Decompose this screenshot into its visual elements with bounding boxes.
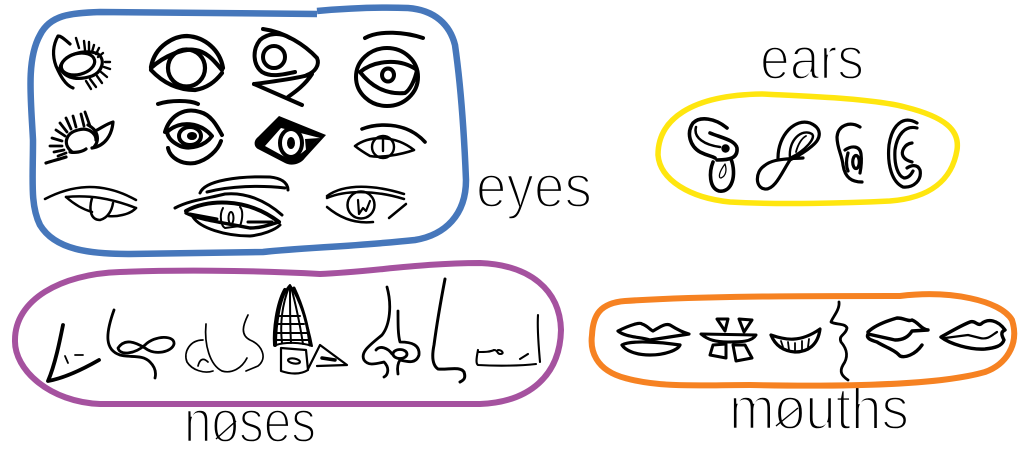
icon: eye 4 <box>356 33 423 106</box>
icon: eye 7 <box>255 116 326 165</box>
icon: mouth 5 <box>867 318 928 357</box>
icon: eye 10 <box>175 177 288 236</box>
heading: noses <box>184 388 316 450</box>
triangles <box>281 345 347 374</box>
icon: ear 1 <box>689 119 737 191</box>
icon: mouth 3 <box>771 329 820 352</box>
icon: nose 2 <box>108 310 174 378</box>
icon: eye 6 <box>158 101 222 163</box>
panel: ears <box>658 94 957 204</box>
purple outline <box>15 263 561 404</box>
heading: mouths <box>729 375 909 442</box>
panel: noses <box>15 263 561 404</box>
icon: nose 7 <box>476 315 540 366</box>
label text: mouths <box>729 375 909 442</box>
panel: eyes <box>30 8 466 254</box>
icon: mouth 4 <box>831 302 848 380</box>
icon: eye 9 <box>45 187 136 220</box>
orange outline <box>592 294 1014 386</box>
heading: eyes: eyes <box>476 153 592 220</box>
icon: eye 5 <box>46 112 113 163</box>
icon: ear 3 <box>837 124 862 182</box>
yellow outline <box>658 94 957 204</box>
o slash <box>216 421 236 439</box>
icon: ear 2 <box>757 122 819 189</box>
icon: ear 4 <box>889 120 920 187</box>
icon: mouth 1 <box>618 323 689 355</box>
icon: nose 4 <box>275 285 347 374</box>
icon: nose 1 <box>48 325 99 381</box>
cone <box>275 285 312 346</box>
icon: eye 11 <box>327 187 406 222</box>
o slash <box>776 408 798 426</box>
heading: ears: ears <box>760 25 864 92</box>
icon: nose 3 <box>186 315 263 372</box>
icon: mouth 6 <box>941 321 1005 349</box>
icon: eye 3 <box>254 29 318 105</box>
icon: mouth 2 <box>701 319 756 361</box>
icon: eye 2 <box>151 36 223 90</box>
icon: eye 1 <box>54 36 110 89</box>
icon: nose 5 <box>363 287 419 377</box>
icon: eye 8 <box>355 125 425 158</box>
blue outline <box>30 8 466 254</box>
icon: nose 6 <box>433 279 465 382</box>
panel: mouths <box>592 294 1014 386</box>
